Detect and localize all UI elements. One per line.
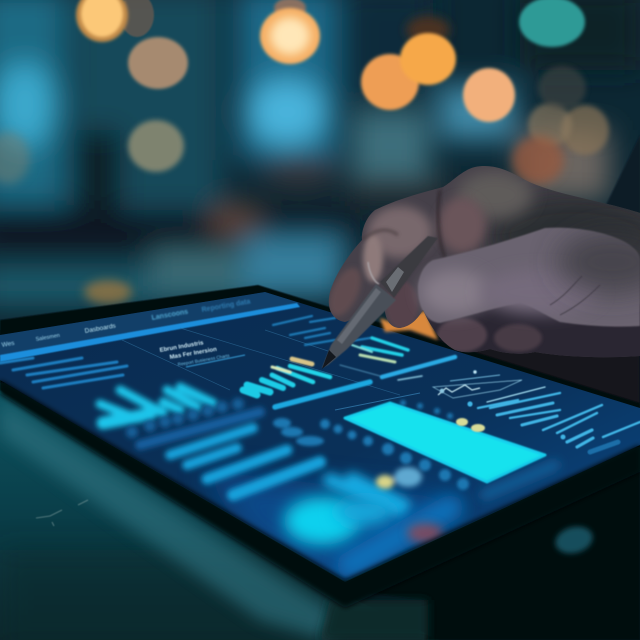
tablet screen — [0, 292, 640, 590]
lower fingers dark palm — [424, 306, 640, 357]
wide blue list bars — [140, 412, 320, 495]
small box chart upper right — [433, 370, 522, 398]
highlight line — [275, 382, 370, 407]
header strip: Reporting data — [201, 298, 251, 314]
foreground cyan blob — [284, 497, 360, 545]
dot row under left chart — [126, 398, 244, 438]
blurred office background — [0, 0, 640, 330]
header strip — [0, 292, 300, 362]
thumb tip highlight — [421, 270, 489, 314]
caption text block — [159, 340, 245, 367]
mini bar chart by stylus — [340, 338, 455, 380]
dark corner behind the hand — [606, 135, 640, 215]
tablet lower edge, defocused — [0, 380, 640, 608]
foreground band and red blur — [350, 508, 450, 565]
left finger tone — [328, 267, 362, 317]
thumb — [418, 228, 640, 327]
large cyan block — [345, 403, 545, 482]
fold between fingers — [438, 190, 445, 258]
caption text block: Ebrun Industris — [159, 340, 205, 354]
fingertip tone — [363, 234, 383, 282]
knuckle tone — [457, 171, 533, 219]
middle finger — [494, 324, 542, 352]
tablet bezel — [0, 285, 640, 600]
foreground chart, defocused — [330, 478, 405, 510]
yellow highlights on block — [456, 418, 485, 432]
wrinkles — [550, 276, 600, 315]
bar chart: left — [100, 387, 213, 423]
ring finger — [437, 318, 487, 352]
table reflection along the tablet edge — [0, 400, 340, 640]
caption text block: Reeport Busieness Charts — [177, 353, 231, 367]
stylus — [322, 236, 438, 369]
mid panel frame — [335, 393, 420, 410]
hand — [320, 160, 640, 369]
panel divider lines — [122, 328, 400, 395]
small list blobs — [273, 400, 469, 490]
surface behind the hand — [430, 340, 640, 405]
left text lines — [0, 358, 127, 388]
under-pen finger — [386, 281, 418, 329]
inner palm pink — [438, 197, 486, 253]
upper panel lines near hand — [273, 316, 370, 345]
header strip: Dasboards — [84, 322, 117, 335]
back of hand shade — [485, 188, 640, 250]
brighter screen glow near foreground — [202, 462, 440, 578]
scratches on table — [36, 500, 88, 526]
table surface — [0, 375, 440, 640]
thumb purple — [480, 270, 600, 314]
teal reflection spot — [552, 523, 596, 557]
thumb right shade — [557, 230, 640, 294]
bokeh lights — [0, 0, 609, 304]
fingernail highlight — [368, 262, 379, 284]
bar chart: centre near pen — [243, 359, 330, 395]
header strip: Wes — [1, 340, 16, 349]
lower right table block — [320, 600, 428, 640]
hand silhouette with soft shading — [320, 160, 640, 365]
orange light under the hand — [380, 310, 438, 340]
dark foreground on the right — [345, 440, 640, 640]
index finger tone — [368, 206, 432, 258]
header strip: Lanscoons — [151, 309, 189, 322]
yellow and pale markers — [376, 467, 422, 489]
caption text block: Mas Fer Inersion — [169, 347, 218, 361]
header strip: Salesmen — [35, 333, 60, 343]
right text lines — [467, 387, 640, 452]
